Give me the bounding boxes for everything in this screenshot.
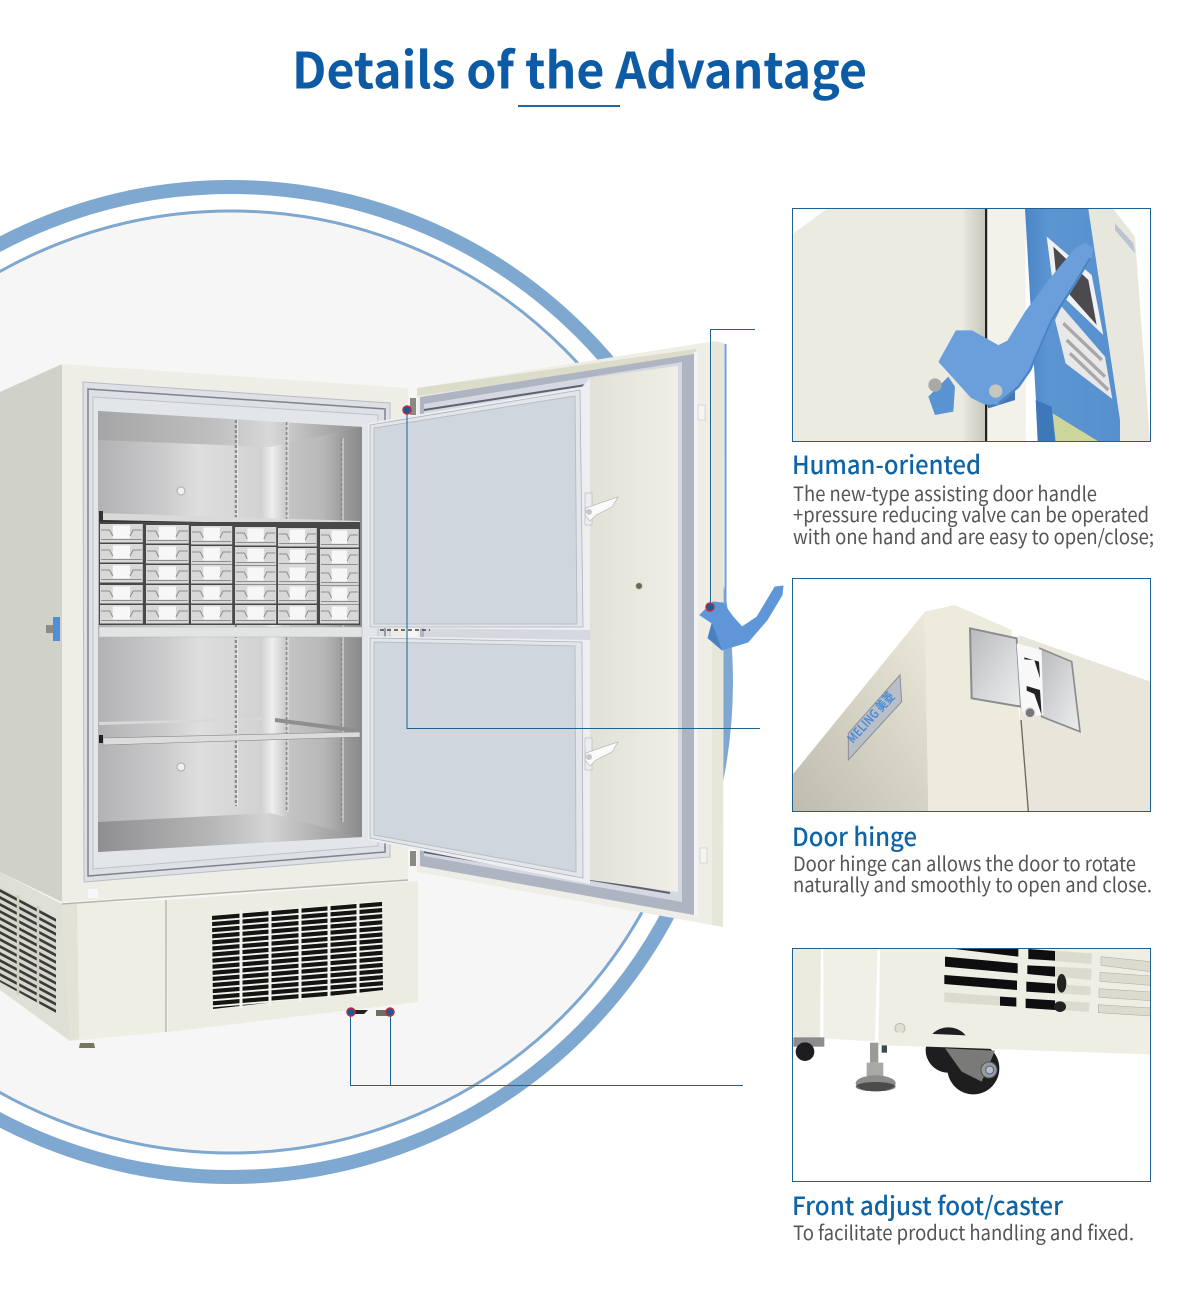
inner door panel lower xyxy=(368,636,590,884)
description: Door hinge can allows the door to rotate xyxy=(793,848,1136,877)
heading: Door hinge xyxy=(792,818,917,854)
description: To facilitate product handling and fixed. xyxy=(793,1217,1134,1246)
freezer product illustration xyxy=(0,341,783,1048)
freezer interior xyxy=(98,411,362,852)
storage drawer rack xyxy=(99,522,360,625)
upper shelf bar xyxy=(99,511,360,528)
inner door panel upper xyxy=(368,378,590,630)
door latches xyxy=(585,493,618,770)
photo frame xyxy=(792,208,1150,442)
side latch xyxy=(46,617,60,641)
panel: human-oriented xyxy=(792,208,1154,550)
photo: hinge close-up xyxy=(793,605,1150,811)
heading: Human-oriented xyxy=(792,446,981,482)
door seam xyxy=(380,629,430,631)
description: +pressure reducing valve can be operated xyxy=(793,499,1149,528)
photo: hinge close-up: MELING 美菱 xyxy=(842,687,899,747)
heading: Front adjust foot/caster xyxy=(792,1187,1064,1223)
title underline xyxy=(518,105,620,107)
description: The new-type assisting door handle xyxy=(793,478,1097,507)
photo: foot and caster close-up xyxy=(793,949,1150,1094)
photo frame xyxy=(792,578,1150,812)
open door frame xyxy=(417,341,726,927)
base unit xyxy=(0,872,418,1041)
lower shelf xyxy=(99,718,360,745)
photo: door handle close-up xyxy=(792,209,1151,441)
description xyxy=(793,848,1152,898)
description xyxy=(793,478,1154,550)
middle shelf xyxy=(99,627,362,637)
circular backdrop rings xyxy=(0,187,726,1177)
photo frame xyxy=(792,948,1150,1182)
feet xyxy=(79,1010,390,1048)
panel: door hinge xyxy=(792,578,1152,898)
door gasket opening xyxy=(83,382,390,882)
leader line: handle xyxy=(706,330,755,611)
leader line: foot and caster xyxy=(347,1008,743,1086)
icon: blue door handle xyxy=(700,586,783,650)
description: with one hand and are easy to open/close; xyxy=(793,521,1154,550)
description: naturally and smoothly to open and close. xyxy=(793,869,1152,898)
leader line: hinge xyxy=(403,406,760,728)
front ventilation grille xyxy=(212,901,383,1009)
cabinet body xyxy=(0,364,416,902)
title: Details of the Advantage xyxy=(292,32,867,104)
panel: front adjust foot and caster xyxy=(792,948,1151,1246)
